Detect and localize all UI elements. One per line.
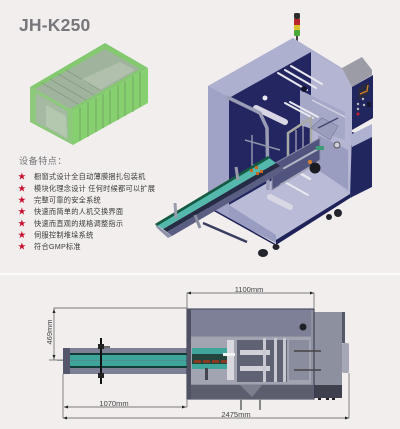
feature 2: ★	[18, 184, 26, 193]
feature 6: ★	[18, 230, 26, 240]
machine feet	[258, 209, 342, 257]
feature 2: 模块化理念设计 任何时候都可以扩展	[34, 184, 155, 193]
dimension label: 1070mm: 1070mm	[99, 399, 129, 408]
dimension lines	[49, 293, 349, 418]
dimension label: 469mm: 469mm	[45, 319, 54, 345]
feature 3: 完整可靠的安全系统	[34, 196, 101, 204]
plan view drawing	[45, 285, 349, 420]
feature list	[18, 172, 155, 251]
feature 6: 伺服控制堆垛系统	[34, 230, 94, 240]
dimension label: 1100mm: 1100mm	[235, 285, 263, 294]
feature 1: 橱窗式设计全自动薄膜捆扎包装机	[34, 172, 146, 181]
machine frame body	[208, 38, 352, 245]
feature 3: ★	[18, 196, 26, 204]
feature 4: ★	[18, 207, 26, 216]
dimension arrows	[52, 292, 349, 420]
feature 7: 符合GMP标准	[34, 242, 81, 251]
dimension label: 2475mm: 2475mm	[221, 410, 251, 419]
icon: signal tower light	[294, 13, 300, 52]
feature 5: 快速而直观的规格调整指示	[34, 219, 123, 228]
feature 4: 快速而简单的人机交换界面	[34, 207, 123, 216]
title: JH-K250	[19, 15, 91, 35]
feature 5: ★	[18, 219, 26, 228]
machine plan body	[187, 309, 349, 410]
heading: equipment features: 设备特点：	[19, 155, 67, 166]
illustration: green film-wrapped product pack	[30, 43, 148, 145]
rollers	[256, 66, 322, 207]
control cabinet	[342, 57, 373, 198]
mechanism	[227, 97, 345, 190]
conveyor	[155, 156, 285, 242]
feature 1: ★	[18, 172, 26, 181]
illustration: isometric machine	[155, 13, 373, 257]
feature 7: ★	[18, 242, 26, 251]
conveyor plan	[57, 338, 188, 384]
